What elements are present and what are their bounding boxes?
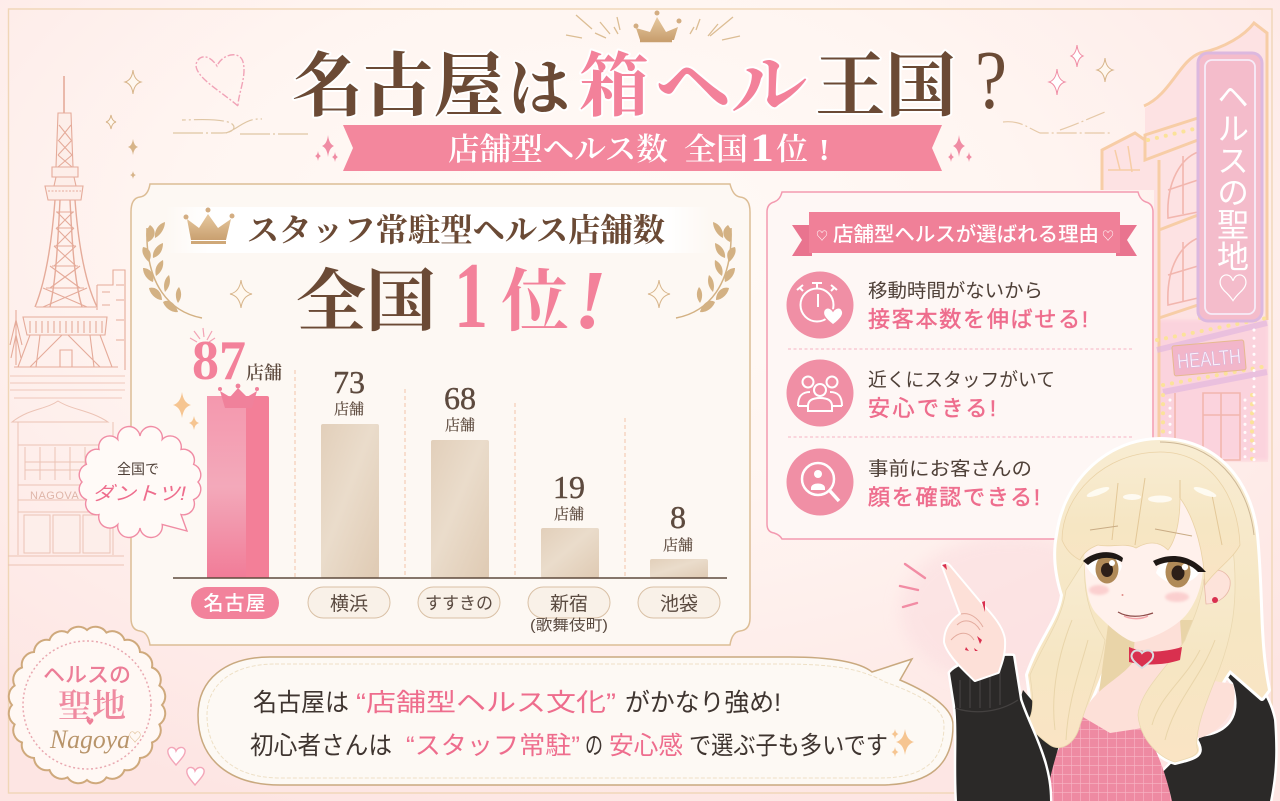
bar: Shinjuku 19 [541, 528, 599, 578]
value: 19: 19 [553, 469, 585, 505]
icon: three people [786, 360, 854, 426]
subtitle text: 位 [776, 132, 808, 167]
emphasis lines by finger [900, 564, 925, 607]
headline: number one nationwide: 1 [454, 244, 488, 348]
label: Susukino [418, 587, 500, 618]
bar: Susukino 68 [431, 440, 489, 578]
value: 87: 87 [192, 330, 246, 392]
decoration: pink hearts [168, 747, 204, 785]
back hair [1025, 440, 1268, 762]
icon: magnifier with person [786, 448, 854, 516]
shaded hair behind neck [1098, 620, 1215, 700]
headline: number one nationwide: ! [574, 254, 607, 347]
hoodie left front [990, 690, 1062, 801]
value: 68: 68 [444, 380, 476, 416]
title: ? [975, 34, 1007, 127]
title: 王国 [815, 49, 956, 126]
value: 68: 店舗 [445, 417, 475, 434]
decoration: sparkle left [230, 280, 252, 308]
label: Ikebukuro [638, 587, 720, 618]
panel: reasons [767, 192, 1153, 539]
subtitle text [448, 125, 829, 170]
hoodie hood and right body [1135, 667, 1275, 801]
title: 箱 [579, 49, 649, 126]
value: 19: 店舗 [554, 506, 584, 523]
headline: number one nationwide: 位 [501, 264, 569, 340]
value: 87 [192, 330, 282, 392]
label: Shinjuku: 新宿 [550, 593, 588, 615]
message line 2: 安心感 [609, 732, 683, 760]
reason text 1: 移動時間がないから [868, 280, 1043, 302]
laurel: right [676, 222, 736, 318]
decoration: sparkles [106, 45, 1113, 179]
bar: Nagoya 87 [207, 396, 269, 578]
character: girl pointing [942, 440, 1275, 801]
label: Nagoya: 名古屋 [204, 592, 266, 615]
label: Ikebukuro: 池袋 [660, 593, 698, 615]
icon: stopwatch with heart [786, 272, 854, 338]
chart axis [173, 577, 727, 579]
decoration: top crown with rays [566, 10, 740, 41]
sparkles beside bar [173, 392, 199, 430]
decoration: sparkle right [648, 280, 670, 308]
pink top [1043, 717, 1172, 801]
neon sign [1198, 53, 1262, 321]
row: check face first [786, 448, 1040, 516]
label: Susukino: すすきの [425, 594, 493, 613]
reason text 2: 近くにスタッフがいて [868, 369, 1055, 391]
hair shine [1086, 485, 1217, 502]
title: は [508, 56, 570, 124]
subtitle text: 1 [750, 125, 774, 170]
panel: store ranking [131, 184, 750, 645]
title: ヘル [655, 49, 807, 126]
background pink glow [900, 535, 1120, 685]
hair lock over chest right [1138, 540, 1235, 762]
badge: holy land of health: Nagoya [49, 725, 130, 754]
headline: number one nationwide [296, 244, 607, 348]
callout: overwhelmingly first [79, 427, 201, 537]
subtitle text: 全国 [684, 132, 748, 167]
title [292, 34, 1007, 127]
label: Yokohama [308, 587, 390, 618]
message line 1: “店舗型ヘルス文化” [356, 689, 616, 717]
choker with heart [1129, 647, 1182, 668]
sign text: ヘルスの聖地♡ [1213, 80, 1249, 304]
badge: holy land of health [9, 627, 165, 783]
label: Shinjuku: (歌舞伎町) [530, 617, 608, 634]
illustration: Nagoya TV tower and station [10, 76, 125, 398]
ribbon heading: ♡ [1102, 229, 1114, 243]
message line 2 [250, 732, 888, 760]
crown on Nagoya bar [218, 384, 259, 408]
row: no travel time: 接客本数を伸ばせる! [868, 307, 1088, 332]
value: 8: 8 [670, 499, 686, 535]
label: Yokohama: 横浜 [330, 593, 368, 615]
subtitle text: ! [819, 132, 829, 167]
hand pointing up [942, 564, 1004, 680]
message line 1: がかなり強め! [625, 689, 781, 717]
label: Shinjuku [528, 587, 610, 634]
value: 8: 店舗 [663, 537, 693, 554]
subtitle ribbon [343, 125, 942, 171]
illustration: station building [8, 401, 124, 565]
decoration: left flourish [173, 119, 308, 134]
value: 73: 73 [333, 364, 365, 400]
nose and mouth [1118, 594, 1153, 619]
value: 8 [663, 499, 693, 554]
ribbon heading [792, 212, 1137, 256]
laurel: left [142, 222, 202, 318]
row: check face first: 顔を確認できる! [868, 485, 1040, 510]
icon: gold crown [184, 208, 234, 244]
headline: number one nationwide: 全国 [296, 264, 436, 340]
health sign [1172, 340, 1246, 376]
value: 19 [553, 469, 585, 523]
health sign: HEALTH [1176, 345, 1242, 374]
message line 1 [253, 689, 781, 717]
decoration: dashed heart [196, 55, 244, 106]
title: 名古屋 [292, 49, 504, 126]
bar chart [173, 328, 727, 634]
callout: overwhelmingly first: ダントツ! [92, 483, 187, 505]
message line 1: 名古屋は [253, 689, 349, 717]
speech bubble: message [198, 657, 953, 785]
panel heading: スタッフ常駐型ヘルス店舗数 [247, 212, 665, 248]
blush [1089, 585, 1189, 602]
hair lock over chest left [1027, 560, 1105, 748]
icon: sparkles [892, 729, 914, 757]
message line 2: “スタッフ常駐” [406, 732, 580, 760]
badge text: ヘルスの [43, 664, 131, 687]
message line 2: の [585, 732, 603, 760]
row: staff nearby: 安心できる! [868, 396, 996, 421]
ear and earring [1204, 570, 1230, 604]
left eye [1083, 552, 1123, 584]
value: 73 [333, 364, 365, 418]
ribbon heading: ♡ [816, 229, 828, 243]
message line 2: 初心者さんは [250, 732, 392, 760]
heading strip [165, 207, 710, 253]
value: 68 [444, 380, 476, 434]
decoration: right flourish [1003, 112, 1110, 133]
subtitle text: 店舗型ヘルス数 [448, 132, 668, 167]
value: 87: 店舗 [246, 362, 282, 383]
ribbon heading: 店舗型ヘルスが選ばれる理由 [833, 223, 1099, 246]
reason text 3: 事前にお客さんの [868, 458, 1032, 480]
bangs [1062, 452, 1240, 585]
callout text: 全国で [117, 461, 159, 477]
station sign text: NAGOVA Sta. [30, 490, 104, 502]
face [1084, 490, 1203, 642]
eyebrows [1090, 526, 1192, 536]
right eye [1153, 556, 1206, 588]
neck and chest [1083, 620, 1235, 738]
row: staff nearby [786, 360, 1055, 426]
badge: holy land of health: 聖地 [58, 688, 126, 725]
bar: Yokohama 73 [321, 424, 379, 578]
message line 2: で選ぶ子も多いです [689, 732, 888, 760]
bar: Ikebukuro 8 [650, 559, 708, 578]
illustration: neon street building [1102, 23, 1268, 462]
hoodie left sleeve [950, 656, 1050, 801]
crown rays above number [190, 328, 215, 342]
row: no travel time [786, 272, 1088, 338]
badge: holy land of health: ♡ [128, 730, 142, 745]
value: 73: 店舗 [334, 401, 364, 418]
label: Nagoya [191, 587, 279, 619]
